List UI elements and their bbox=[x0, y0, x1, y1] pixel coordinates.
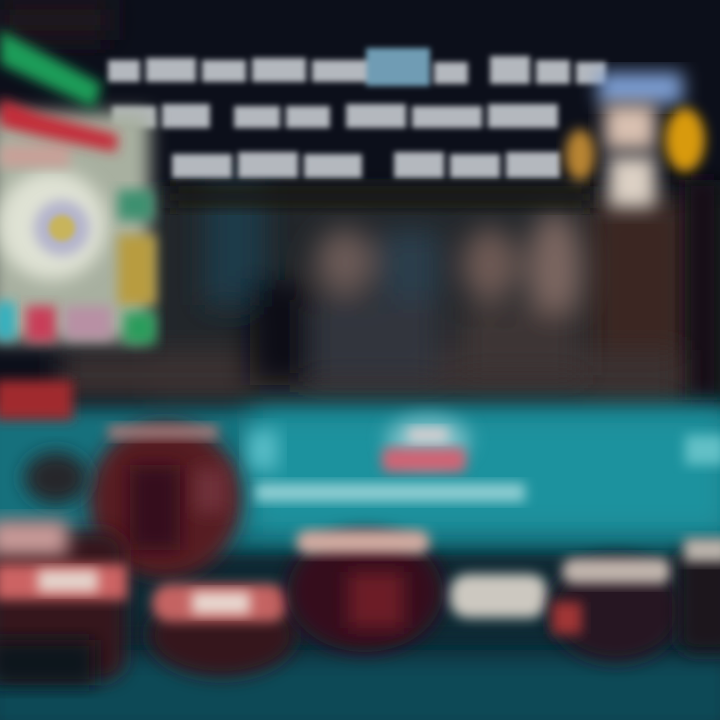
hand with white and blue shapes bbox=[565, 72, 683, 208]
white flat chip bbox=[450, 574, 548, 618]
poker chip stack: front left bbox=[0, 520, 127, 685]
poker chip stack: center bbox=[287, 530, 443, 652]
table printed text strip bbox=[255, 483, 525, 502]
teal poker table bbox=[0, 408, 720, 720]
poker chip stack: right bbox=[550, 558, 682, 662]
poker chip stack: far right bbox=[678, 538, 720, 653]
background: blurred casino patrons bbox=[205, 185, 583, 385]
table logo: red and white mark bbox=[382, 416, 470, 472]
left panel: roulette wheel board bbox=[0, 112, 156, 344]
poker chip stack: back tall bbox=[89, 422, 241, 578]
poker chip stack: front middle bbox=[148, 584, 296, 677]
red side sign bbox=[0, 380, 73, 420]
red band on wheel board bbox=[0, 98, 118, 152]
title: blurred white headline bbox=[108, 48, 606, 178]
shadow under headline bbox=[170, 186, 590, 208]
green banner on wheel board bbox=[0, 30, 102, 108]
gold coin bbox=[665, 108, 705, 172]
dark chip behind left stack bbox=[24, 452, 88, 504]
